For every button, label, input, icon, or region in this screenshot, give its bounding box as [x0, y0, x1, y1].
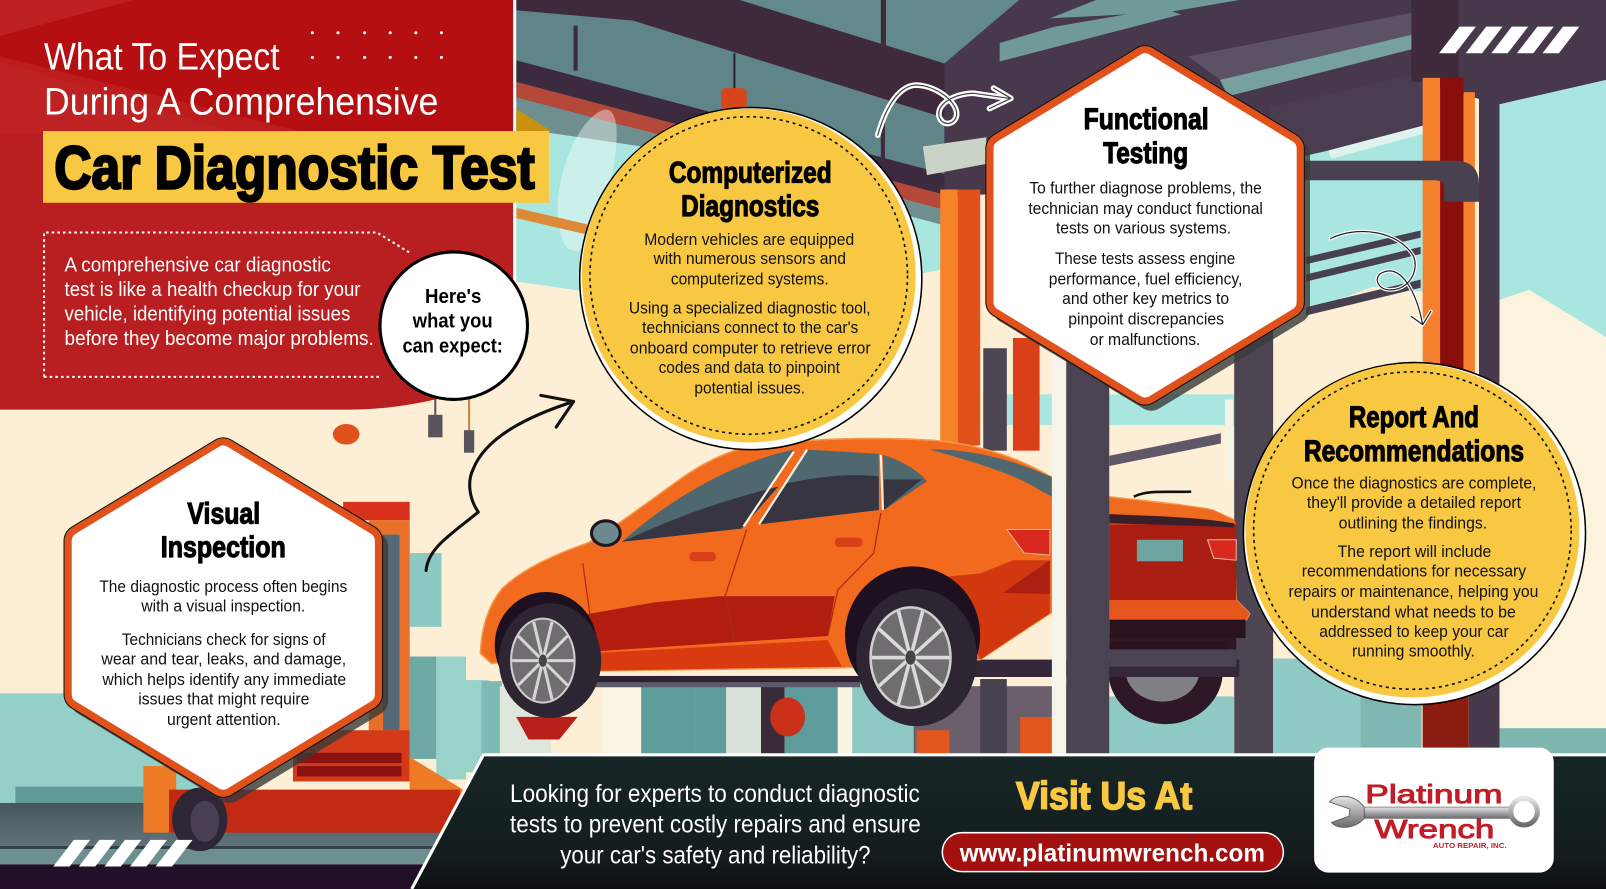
support columns: [940, 0, 1499, 758]
panel: computerized diagnostics: potential issues.: [694, 378, 805, 397]
hanging clamps: [333, 397, 474, 453]
intro text: vehicle, identifying potential issues: [65, 304, 350, 326]
panel: report and recommendations: running smoothly.: [1352, 642, 1475, 661]
decorative stripes: bottom left: [53, 840, 193, 866]
website pill: [942, 833, 1283, 872]
panel: visual inspection: Technicians check for signs of: [122, 630, 326, 649]
panel: computerized diagnostics: Modern vehicles are equipped: [644, 230, 854, 249]
arrow: visual inspection to computerized diagnostics: [426, 395, 574, 570]
panel: computerized diagnostics: Using a specialized diagnostic tool,: [629, 298, 871, 317]
panel: report and recommendations: Recommendations: [1304, 435, 1524, 468]
panel: computerized diagnostics: technicians connect to the car's: [642, 318, 858, 337]
panel: report and recommendations: repairs or maintenance, helping you: [1288, 582, 1538, 601]
title line one and two: What To Expect: [44, 37, 280, 79]
panel: visual inspection: Visual: [187, 497, 260, 530]
panel: visual inspection: with a visual inspection.: [140, 596, 305, 615]
title line one and two: [44, 37, 438, 124]
window reflection and hanging lamp: [516, 53, 747, 251]
panel: visual inspection: urgent attention.: [167, 710, 281, 729]
intro text: before they become major problems.: [65, 328, 374, 350]
panel: functional testing: technician may conduct functional: [1028, 199, 1263, 218]
panel: functional testing: To further diagnose problems, the: [1029, 179, 1262, 198]
panel: functional testing: These tests assess engine: [1055, 249, 1235, 268]
panel: computerized diagnostics: Computerized: [669, 156, 832, 189]
call to action text: [510, 780, 921, 869]
call to action text: your car's safety and reliability?: [560, 841, 871, 869]
panel: report and recommendations: understand what needs to be: [1311, 603, 1516, 622]
panel: report and recommendations: addressed to keep your car: [1319, 622, 1509, 641]
panel: functional testing: tests on various systems.: [1056, 219, 1231, 238]
panel: report and recommendations: outlining the findings.: [1339, 513, 1487, 532]
panel: functional testing: Functional: [1084, 103, 1209, 136]
gold ribbon fold: [516, 109, 551, 131]
arrow: functional testing to report: [1330, 232, 1431, 325]
callout: here's what you can expect: can expect:: [403, 335, 503, 357]
panel: functional testing: pinpoint discrepancies: [1068, 310, 1224, 329]
panel: functional testing: performance, fuel efficiency,: [1049, 270, 1242, 289]
panel: functional testing: or malfunctions.: [1090, 330, 1200, 349]
panel: report and recommendations: [1243, 363, 1586, 705]
logo card: AUTO REPAIR, INC.: [1433, 841, 1507, 850]
car body: [480, 438, 1250, 671]
intro text: A comprehensive car diagnostic: [65, 254, 331, 276]
decorative dot grid: [311, 31, 443, 59]
logo card: [1314, 748, 1554, 873]
ground and left scenery: [0, 553, 1606, 889]
intro text: test is like a health checkup for your: [65, 279, 361, 301]
rear wiper: [1134, 492, 1191, 497]
center lift post: [1052, 348, 1109, 754]
door handles: [689, 538, 862, 561]
panel: visual inspection: which helps identify any immediate: [101, 670, 346, 689]
panel: visual inspection: The diagnostic process often begins: [99, 577, 347, 596]
front wheel: [495, 592, 601, 718]
lift parts under car: [516, 679, 1063, 755]
website pill: www.platinumwrench.com: [959, 840, 1265, 867]
panel: visual inspection: Inspection: [161, 531, 286, 564]
panel: computerized diagnostics: [580, 108, 922, 450]
panel: functional testing: Testing: [1103, 137, 1188, 170]
panel: visual inspection: [80, 454, 373, 788]
callout: here's what you can expect: [380, 252, 527, 399]
roof structure: [516, 0, 1606, 225]
car on lift: [480, 438, 1250, 726]
callout: here's what you can expect: what you: [412, 311, 493, 333]
far rear wheel: [1108, 618, 1236, 724]
dotted intro box: [44, 232, 412, 377]
panel: visual inspection: issues that might require: [138, 690, 309, 709]
windows: [622, 450, 1061, 542]
logo card: Platinum: [1365, 781, 1503, 809]
call to action text: Looking for experts to conduct diagnostic: [510, 780, 920, 808]
rear wheel: [845, 566, 980, 726]
panel: computerized diagnostics: onboard computer to retrieve error: [630, 338, 871, 357]
logo card: Wrench: [1375, 816, 1494, 844]
intro text: [65, 254, 374, 350]
bottom banner: [412, 748, 1606, 889]
panel: functional testing: and other key metrics to: [1062, 289, 1229, 308]
tail lights and plate: [1007, 530, 1236, 561]
title banner: Car Diagnostic Test: [54, 133, 535, 201]
call to action text: tests to prevent costly repairs and ensure: [510, 811, 921, 839]
lift beam: [592, 649, 1239, 687]
panel: computerized diagnostics: Diagnostics: [681, 190, 819, 223]
panel: computerized diagnostics: with numerous sensors and: [653, 249, 846, 268]
red intro panel: [0, 0, 516, 410]
mirror: [591, 521, 620, 545]
panel: functional testing: [1002, 61, 1295, 395]
title line one and two: During A Comprehensive: [44, 82, 438, 124]
panel: report and recommendations: Report And: [1349, 401, 1479, 434]
panel: report and recommendations: they'll provide a detailed report: [1307, 493, 1521, 512]
callout: here's what you can expect: Here's: [425, 286, 481, 308]
visit us heading: Visit Us At: [1016, 775, 1192, 818]
arrow: computerized diagnostics to functional testing: [878, 85, 1011, 135]
panel: report and recommendations: The report will include: [1338, 542, 1491, 561]
panel: visual inspection: wear and tear, leaks, and damage,: [100, 650, 346, 669]
panel: computerized diagnostics: codes and data to pinpoint: [659, 358, 840, 377]
panel: report and recommendations: recommendations for necessary: [1302, 562, 1527, 581]
panel: report and recommendations: Once the diagnostics are complete,: [1292, 474, 1536, 493]
panel: computerized diagnostics: computerized systems.: [671, 270, 829, 289]
forklift: [143, 502, 463, 851]
door lines: [583, 513, 881, 651]
decorative stripes: top right: [1439, 27, 1579, 53]
icon: wrench: [1329, 796, 1537, 827]
